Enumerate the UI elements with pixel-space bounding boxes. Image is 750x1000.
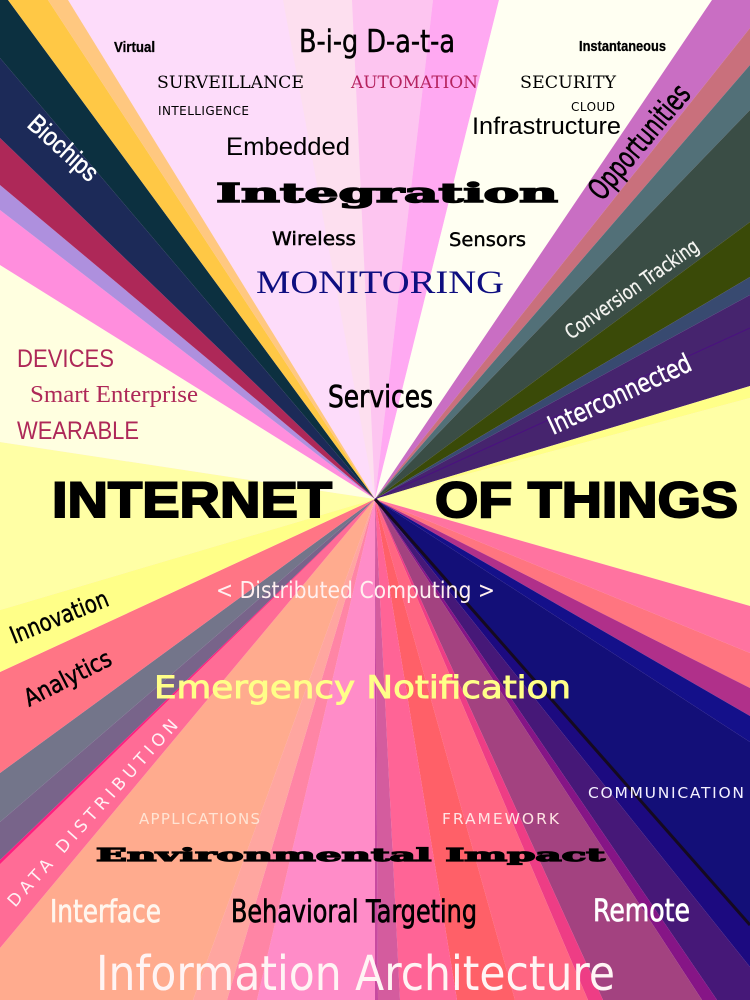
word: Virtual: Virtual — [114, 39, 155, 56]
word: Integration: Integration — [216, 179, 558, 209]
angled word: Innovation: Innovation — [6, 585, 113, 650]
word: Remote: Remote — [593, 893, 690, 929]
word: Instantaneous: Instantaneous — [579, 38, 666, 55]
title: Internet: INTERNET — [52, 472, 332, 528]
word: Embedded: Embedded — [226, 133, 350, 161]
word: Cloud: CLOUD — [571, 100, 615, 114]
word: Framework: FRAMEWORK — [442, 810, 560, 828]
word: Big Data: B-i-g D-a-t-a — [299, 24, 455, 60]
word: Smart Enterprise: Smart Enterprise — [30, 382, 198, 408]
angled word: Opportunities: Opportunities — [581, 77, 698, 207]
angled word: Analytics: Analytics — [19, 644, 116, 712]
angled word: Data Distribution: DATA DISTRIBUTION — [4, 716, 183, 911]
word: Environmental Impact: Environmental Impact — [96, 845, 607, 866]
word: Sensors: Sensors — [449, 229, 526, 251]
word: Infrastructure: Infrastructure — [472, 113, 621, 140]
word: Surveillance: SURVEILLANCE — [157, 73, 304, 92]
word: Security: SECURITY — [520, 73, 617, 92]
word: Interface: Interface — [50, 894, 161, 930]
word: Devices: DEVICES — [17, 345, 114, 373]
word: Distributed Computing: < Distributed Computing > — [216, 578, 495, 604]
word: Wearable: WEARABLE — [17, 417, 139, 445]
word: Applications: APPLICATIONS — [139, 810, 260, 828]
word: Automation: AUTOMATION — [350, 73, 478, 92]
word: Services: Services — [328, 380, 433, 415]
angled word: Interconnected: Interconnected — [543, 349, 696, 441]
angled word: Conversion Tracking: Conversion Tracking — [560, 234, 703, 344]
title: Of Things: OF THINGS — [435, 472, 738, 528]
word: Behavioral Targeting: Behavioral Targeting — [231, 894, 477, 930]
word: Intelligence: INTELLIGENCE — [158, 104, 249, 118]
word: Communication: COMMUNICATION — [588, 784, 744, 802]
angled word: Biochips: Biochips — [22, 108, 105, 187]
word: Wireless: Wireless — [272, 228, 356, 250]
word: Monitoring: MONITORING — [256, 265, 504, 301]
word: Emergency Notification: Emergency Notification — [154, 670, 571, 706]
